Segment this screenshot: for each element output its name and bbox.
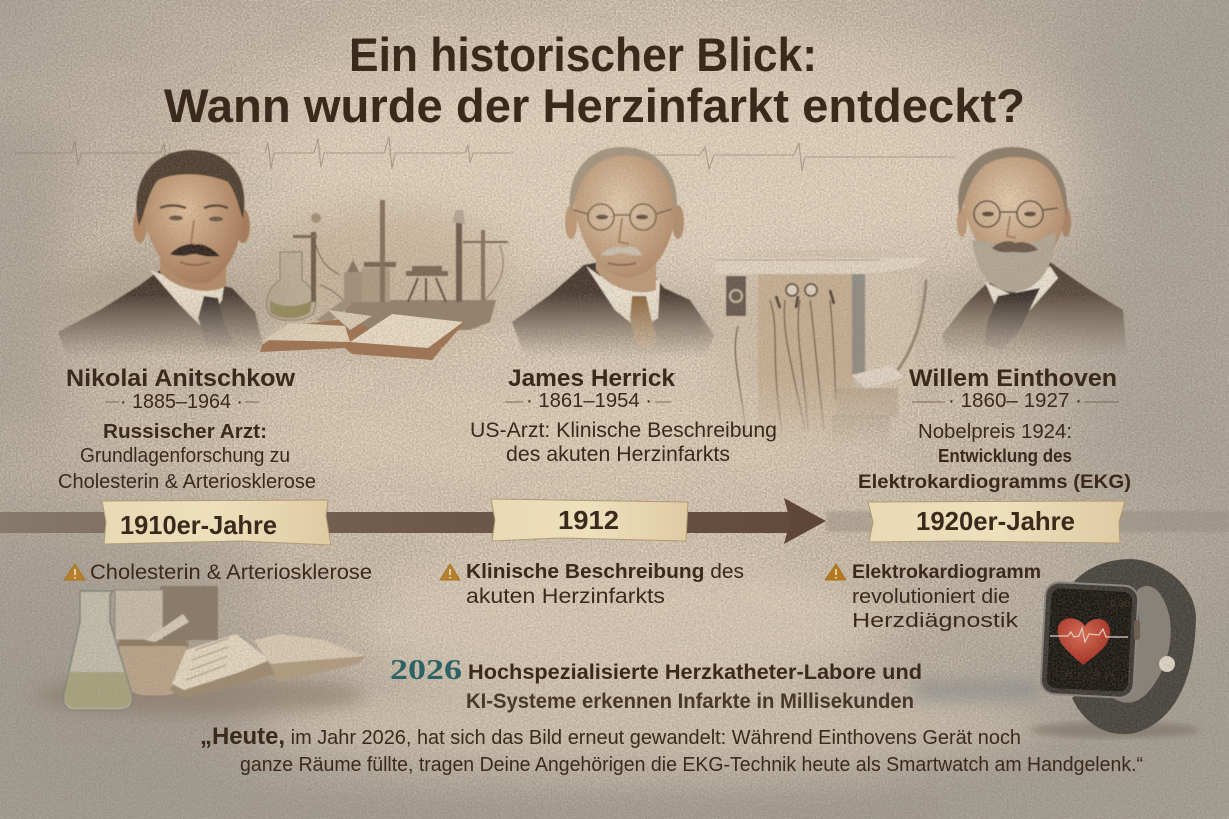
- note: Elektrokardiogramm: [825, 562, 1041, 632]
- note: Cholesterin: Cholesterin & Arteriosklerose: [90, 561, 372, 584]
- note: Elektrokardiogramm: Elektrokardiogramm: [852, 562, 1041, 583]
- biography: Willem Einthoven: · 1860– 1927 ·: [948, 390, 1082, 412]
- title: Wann wurde der Herzinfarkt entdeckt?: [164, 79, 1025, 132]
- illustration: flask, mortar and open book: [35, 586, 366, 715]
- 2026 outlook: KI-Systeme erkennen Infarkte in Millisekunden: [466, 690, 914, 713]
- biography: Willem Einthoven: Nobelpreis 1924:: [918, 421, 1072, 443]
- timeline arrow: [0, 498, 1229, 544]
- biography: James Herrick: · 1861–1954 ·: [526, 390, 652, 412]
- illustration: laboratory apparatus and open book: [260, 200, 515, 360]
- collar and shirt: [150, 270, 225, 325]
- ecg trace behind portraits: [15, 137, 955, 171]
- date banner: 1912: [491, 499, 688, 541]
- portrait: Nikolai Anitschkow: [58, 149, 282, 354]
- title: [164, 28, 1025, 132]
- note: Elektrokardiogramm: revolutioniert die: [852, 586, 1010, 608]
- illustration: early ECG machine: [714, 245, 928, 447]
- note: Elektrokardiogramm: Herzdiägnostik: [852, 610, 1019, 632]
- watch screen: heart and pulse: [1050, 599, 1130, 679]
- note: Klinische Beschreibung: Klinische Beschreibung des: [466, 561, 744, 583]
- date banner: 1912: 1912: [558, 505, 619, 535]
- neck and head: [159, 258, 226, 292]
- closing quote: [200, 723, 1143, 776]
- closing quote: ganze Räume füllte, tragen Deine Angehörigen die EKG-Technik heute als Smartwatch am Handgelenk.“: [240, 754, 1143, 776]
- biography: James Herrick: des akuten Herzinfarkts: [506, 443, 730, 466]
- watch strap: [1068, 559, 1196, 734]
- closing quote: „Heute, im Jahr 2026, hat sich das Bild erneut gewandelt: Während Einthovens Gerät noch: [200, 723, 1021, 750]
- date banner: 1920er-Jahre: 1920er-Jahre: [916, 506, 1075, 536]
- biography: Nikolai Anitschkow: Grundlagenforschung zu: [80, 445, 290, 467]
- portrait: James Herrick: [512, 146, 717, 354]
- 2026 outlook: 2026: [390, 654, 462, 686]
- hair: [137, 150, 244, 226]
- biography: Nikolai Anitschkow: Russischer Arzt:: [103, 421, 267, 443]
- icon: warning triangle: [440, 564, 460, 580]
- portrait: Willem Einthoven: [930, 146, 1126, 353]
- biography: Nikolai Anitschkow: Cholesterin & Arteriosklerose: [58, 471, 316, 493]
- smartwatch illustration: [1030, 559, 1200, 738]
- watch case: [1040, 582, 1139, 698]
- icon: warning triangle: [825, 564, 846, 580]
- moustache: [170, 244, 220, 257]
- biography: Nikolai Anitschkow: [58, 365, 316, 493]
- eyes and brows: [160, 206, 228, 208]
- open book: [260, 310, 474, 360]
- biography: Willem Einthoven: Entwicklung des: [938, 446, 1072, 466]
- biography: Willem Einthoven: Elektrokardiogramms (EKG): [858, 472, 1131, 493]
- biography: Nikolai Anitschkow: Nikolai Anitschkow: [66, 365, 295, 392]
- note: Klinische Beschreibung: [440, 561, 744, 608]
- 2026 outlook: Hochspezialisierte Herzkatheter-Labore und: [468, 661, 922, 684]
- biography: James Herrick: US-Arzt: Klinische Beschreibung: [470, 419, 777, 442]
- 2026 outlook: [390, 654, 922, 713]
- biography: Willem Einthoven: Willem Einthoven: [909, 365, 1117, 392]
- date banner: 1920er-Jahre: [868, 501, 1125, 543]
- icon: warning triangle: [64, 564, 85, 580]
- title: Ein historischer Blick:: [349, 28, 817, 81]
- watch screen: heart and pulse: ← 30 61 25 14: [1052, 672, 1114, 679]
- biography: Nikolai Anitschkow: · 1885–1964 ·: [120, 391, 243, 413]
- necktie: [198, 296, 234, 346]
- jacket: [58, 270, 263, 354]
- note: Klinische Beschreibung: akuten Herzinfarkts: [466, 585, 665, 608]
- biography: Willem Einthoven: [858, 365, 1131, 493]
- date banner: 1910er-Jahre: [102, 500, 331, 545]
- biography: James Herrick: [470, 365, 777, 466]
- date banner: 1910er-Jahre: 1910er-Jahre: [120, 510, 277, 540]
- biography: James Herrick: James Herrick: [508, 365, 676, 392]
- watch screen: heart and pulse: 9 30: [1110, 599, 1130, 610]
